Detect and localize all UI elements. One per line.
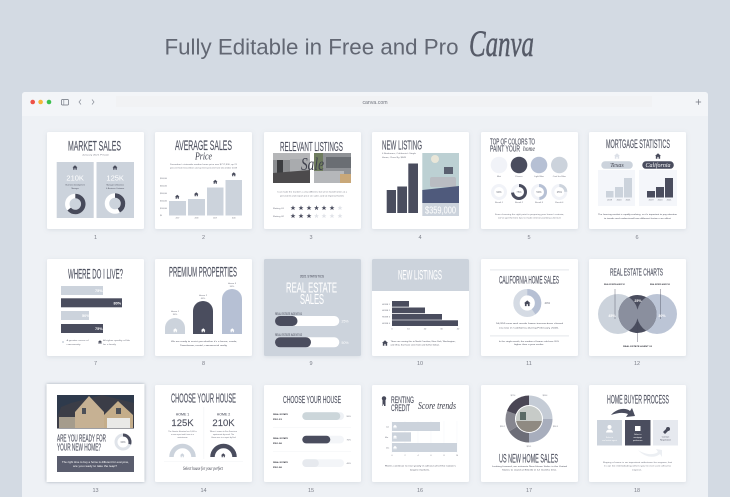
panel: 2 average sales: 2019 xyxy=(213,218,217,220)
title xyxy=(164,24,534,65)
panel: 2 average sales: 2020 xyxy=(232,218,236,220)
panel: 2 average sales: 2018 xyxy=(195,218,198,220)
panel: 16 renting credit: 10 xyxy=(456,455,458,457)
panel: 9 real estate sales: 2021 STATISTICS xyxy=(300,274,324,278)
panel: 8 premium properties: Townhome, rental, commercial realty xyxy=(180,344,228,347)
panel: 9 real estate sales: 50% xyxy=(342,341,349,345)
panel: 13 are you ready: YOUR NEW HOME? xyxy=(57,442,101,454)
panel: 3 relevant listings: I can make the market's a very different, but we've found homes at a xyxy=(277,190,348,194)
panel: 12 real estate charts: REAL ESTATE AGENT 01 xyxy=(604,283,626,286)
panel: 17 us new home sales: US NEW HOME SALES xyxy=(499,453,558,465)
panel: 14 choose your house: HOME 1 xyxy=(176,412,189,416)
panel: 15 choose your house: 70% xyxy=(346,440,351,442)
panel: 15 choose your house: REAL ESTATE xyxy=(273,461,289,464)
arrow xyxy=(611,408,635,417)
panel: 16 renting credit: 4 xyxy=(417,455,419,457)
panel: 18 home buyer process: preference xyxy=(633,440,643,442)
panel: 11 california home sales: escrow in California during February 2020. xyxy=(499,326,560,330)
panel: 14 choose your house: The Greater Houston has 1,000 in xyxy=(168,430,197,433)
panel: 1 market sales: & Business Customer xyxy=(106,187,125,190)
browser window: canva.com xyxy=(362,100,388,106)
photo: interior room xyxy=(273,153,310,183)
panel: 15 choose your house xyxy=(264,385,361,482)
donut chart with photo xyxy=(506,396,552,443)
panel: 5 top of colors: 50% xyxy=(536,190,542,194)
panel: 5 top of colors: Result 4 xyxy=(555,201,564,204)
panel: 15 choose your house: $52.01 xyxy=(273,419,283,421)
panel: 8 premium properties xyxy=(155,259,252,356)
panel: 10 new listings: HOME 3 xyxy=(382,316,391,318)
panel: 18 home buyer process: expect. xyxy=(632,468,643,472)
panel: 10 new listings: There are seeing this in North Carolina, New York, Washington, xyxy=(390,340,456,343)
panel: 9 real estate sales: REAL ESTATE xyxy=(286,280,337,296)
panel: 16 renting credit: RENTING xyxy=(391,395,414,406)
panel: 5 top of colors: Result 1 xyxy=(495,201,504,204)
panel: 12 real estate charts: REAL ESTATE CHARTS xyxy=(610,266,663,278)
panel: 5 top of colors: TOP OF COLORS TO xyxy=(490,136,535,146)
photo: house xyxy=(57,395,134,428)
panel: 11 california home sales: CALIFORNIA HOME SALES xyxy=(499,274,559,286)
panel: 6 mortgage statistics: 2020 xyxy=(658,200,663,202)
label 13: 13 xyxy=(92,488,99,494)
panel: 14 choose your house: When it comes to San Francisco xyxy=(210,430,237,433)
panel: 17 us new home sales xyxy=(481,385,578,482)
panel: 10 new listings: 0 xyxy=(391,328,393,330)
panel: 15 choose your house: REAL ESTATE xyxy=(273,437,289,440)
panel: 8 premium properties: House 1 xyxy=(171,311,180,313)
panel: 3 relevant listings: RELEVANT LISTINGS xyxy=(280,140,343,154)
label 2: 2 xyxy=(202,235,205,241)
panel: 16 renting credit xyxy=(372,385,469,482)
panel: 1 market sales: Business Development xyxy=(66,184,85,186)
panel: 11 california home sales: In the single month, the number of homes sold was 20% xyxy=(499,340,559,343)
panel: 15 choose your house: CHOOSE YOUR HOUSE xyxy=(283,394,341,406)
panel: 10 new listings: 30 xyxy=(440,328,443,330)
panel: 15 choose your house: REAL ESTATE xyxy=(273,413,289,416)
panel: 6 mortgage statistics: 2021 xyxy=(667,200,672,202)
panel: 14 choose your house: Select house for your perfect xyxy=(183,465,223,472)
panel: 14 choose your house: HOME 2 xyxy=(217,412,230,416)
panel: 18 home buyer process: Select a xyxy=(634,433,642,436)
icon: key xyxy=(382,396,386,406)
panel: 13 are you ready: 30% xyxy=(120,440,126,444)
panel: 8 premium properties: House 3 xyxy=(228,283,237,285)
label 9: 9 xyxy=(309,361,313,367)
panel: 7 where do i live: community xyxy=(66,343,82,346)
label 18: 18 xyxy=(634,488,640,494)
label 12: 12 xyxy=(634,361,640,367)
panel: 5 top of colors: home xyxy=(523,145,535,153)
panel: 8 premium properties: 30% xyxy=(173,314,177,316)
title: Canva xyxy=(469,24,534,65)
panel: 8 premium properties: 50% xyxy=(230,286,234,288)
panel: 1 market sales: MARKET SALES xyxy=(68,139,121,154)
browser window xyxy=(22,92,708,497)
panel: 7 where do i live: A greater sense of xyxy=(66,339,89,342)
panel: 3 relevant listings xyxy=(264,132,361,229)
star ratings xyxy=(290,205,342,218)
panel: 8 premium properties: 40% xyxy=(201,298,205,300)
panel: 18 home buyer process: mortgage xyxy=(633,436,643,439)
panel: 12 real estate charts: REAL ESTATE AGENT 02 xyxy=(650,283,671,286)
panel: 10 new listings: 10 xyxy=(407,328,410,330)
panel: 2 average sales: $300,000 xyxy=(160,193,167,195)
panel: 7 where do i live xyxy=(47,259,144,356)
panel: 2 average sales: $400,000 xyxy=(160,186,167,188)
panel: 5 top of colors: we've got the best tips to make interior painting a breeze xyxy=(498,216,562,220)
panel: 5 top of colors: Result 3 xyxy=(535,201,544,204)
panel: 11 california home sales: higher than a year earlier. xyxy=(514,343,544,346)
panel: 10 new listings: 40 xyxy=(457,328,460,330)
panel: 10 new listings: HOME 2 xyxy=(382,310,391,312)
panel: 14 choose your house xyxy=(155,385,252,482)
panel: 1 market sales: Manager & Business xyxy=(106,184,124,186)
panel: 5 top of colors: Flavors xyxy=(515,175,523,178)
panel: 3 relevant listings: Rating 01 xyxy=(273,207,285,210)
panel: 9 real estate sales: REAL ESTATE AGENT 01 xyxy=(275,312,302,316)
arrow xyxy=(638,449,662,457)
panel: 7 where do i live: WHERE DO I LIVE? xyxy=(68,267,123,282)
panel: 18 home buyer process xyxy=(589,385,686,482)
panel: 5 top of colors: 75% xyxy=(516,190,522,194)
panel: 12 real estate charts: 25% xyxy=(634,299,642,303)
panel: 2 average sales: percent from December and up 16.5 percent from December 2019 xyxy=(170,166,238,170)
label 4: 4 xyxy=(418,235,422,241)
panel: 15 choose your house: 90% xyxy=(346,416,351,418)
panel: 16 renting credit: Mar xyxy=(385,436,389,439)
label 5: 5 xyxy=(527,235,531,241)
label 6: 6 xyxy=(635,235,639,241)
panel: 11 california home sales: 54,955 new and resale home transactions closed xyxy=(496,322,564,325)
panel: 10 new listings xyxy=(372,259,469,356)
panel: 5 top of colors: Light Blue xyxy=(534,175,545,178)
panel: 2 average sales: $500,000 xyxy=(160,178,167,180)
panel: 13 are you ready: ARE YOU READY FOR xyxy=(57,432,106,444)
panel: 4 new listing xyxy=(372,132,469,229)
panel: 16 renting credit: Score trends xyxy=(418,400,456,412)
panel: 3 relevant listings: Sale xyxy=(301,154,324,174)
panel: 16 renting credit: 2 xyxy=(404,455,406,457)
panel: 5 top of colors: 25% xyxy=(557,190,563,194)
panel: 6 mortgage statistics: to trends and understand how different factors can affect xyxy=(604,217,671,220)
bar chart xyxy=(387,164,418,213)
panel: 17 us new home sales: $26.2 xyxy=(500,426,505,428)
panel: 16 renting credit: Rents continue to rise yearly in almost all of the nation's xyxy=(385,464,457,468)
panel: 7 where do i live: 75% xyxy=(95,289,103,293)
panel: 5 top of colors: Result 2 xyxy=(515,201,524,204)
panel: 4 new listing: 4 Bedrooms, California's Single xyxy=(382,152,417,155)
panel: 15 choose your house: 40% xyxy=(346,463,351,465)
panel: 17 us new home sales: Looking forward, we estimate New Home Sales in the United xyxy=(492,465,568,468)
panel: 14 choose your house: Home was in a report by Fed xyxy=(211,436,236,439)
panel: 14 choose your house: a new report and it was in a xyxy=(171,433,195,436)
panel: 16 renting credit: Dec xyxy=(386,448,389,450)
panel: 14 choose your house: apartments by week. The xyxy=(213,433,234,436)
panel: 5 top of colors: 90% xyxy=(496,190,502,194)
panel: 18 home buyer process: Select a xyxy=(606,436,614,439)
panel: 6 mortgage statistics: 2020 xyxy=(617,200,622,202)
label 15: 15 xyxy=(308,488,314,494)
panel: 15 choose your house: $52.00 xyxy=(273,467,283,469)
panel: 16 renting credit: 6 xyxy=(430,455,432,457)
panel: 10 new listings: 20 xyxy=(424,328,427,330)
panel: 6 mortgage statistics: 2019 xyxy=(649,200,654,202)
label 1: 1 xyxy=(94,235,97,241)
panel: 13 are you ready: The right time to buy a home is different for everyone, xyxy=(62,461,129,464)
panel: 1 market sales: Manager xyxy=(71,187,79,190)
label 17: 17 xyxy=(526,488,532,494)
panel: 5 top of colors: Mist xyxy=(497,175,501,178)
panel: 16 renting credit: largest markets. xyxy=(410,468,431,472)
panel: 5 top of colors: Cool Ice Blue xyxy=(553,176,567,178)
panel: 15 choose your house: $52.00 xyxy=(273,443,283,445)
panel: 1 market sales xyxy=(47,132,144,229)
label 8: 8 xyxy=(202,361,205,367)
panel: 2 average sales: $200,000 xyxy=(160,200,167,202)
panel: 9 real estate sales: REAL ESTATE AGENT 02 xyxy=(275,333,302,337)
bar chart xyxy=(392,301,458,326)
panel: 6 mortgage statistics: 2019 xyxy=(607,200,613,202)
label 3: 3 xyxy=(309,235,313,241)
panel: 7 where do i live: 50% xyxy=(82,314,90,318)
panel: 17 us new home sales: $26.4 xyxy=(543,395,547,397)
panel: 7 where do i live: 80% xyxy=(114,301,122,305)
panel: 8 premium properties: We are ready to assist you whether it's a house, condo, xyxy=(171,340,237,343)
panel: 9 real estate sales xyxy=(264,259,361,356)
panel: 1 market sales: January 2021 Private xyxy=(82,154,110,156)
panel: 10 new listings: HOME 1 xyxy=(382,304,391,306)
panel: 18 home buyer process: Negotiation xyxy=(660,438,672,442)
panel: 2 average sales: 2017 xyxy=(176,218,179,220)
panel: 18 home buyer process: Contact xyxy=(662,436,670,438)
photo: kitchen xyxy=(314,153,351,183)
panel: 3 relevant listings: Rating 02 xyxy=(273,215,285,218)
panel: 1 market sales: 210K xyxy=(66,174,84,182)
panel: 12 real estate charts: 30% xyxy=(658,314,666,318)
panel: 6 mortgage statistics xyxy=(589,132,686,229)
panel: 17 us new home sales: $25.1 xyxy=(527,446,531,448)
panel: 13 are you ready xyxy=(46,384,144,482)
panel: 9 real estate sales: SALES xyxy=(300,292,324,308)
panel: 17 us new home sales: $24.3 xyxy=(553,426,558,428)
panel: 5 top of colors: PAINT YOUR xyxy=(490,144,520,154)
panel: 16 renting credit: 0 xyxy=(391,455,393,457)
panel: 5 top of colors xyxy=(481,132,578,229)
panel: 11 california home sales: 40% xyxy=(544,301,551,305)
panel: 5 top of colors: From choosing the right paint to preparing your home's exterior, xyxy=(495,213,564,216)
panel: 6 mortgage statistics: Texas xyxy=(610,163,624,169)
panel: 6 mortgage statistics: 2021 xyxy=(626,200,631,202)
panel: 6 mortgage statistics: The housing market is rapidly evolving, so it's important to pay attention xyxy=(598,213,678,216)
panel: 17 us new home sales: $27.4 xyxy=(511,395,515,397)
panel: 12 real estate charts: 45% xyxy=(608,314,616,318)
panel: 1 market sales: 125K xyxy=(106,174,124,182)
panel: 10 new listings: HOME 4 xyxy=(382,323,391,325)
panel: 7 where do i live: A higher quality of life xyxy=(103,339,131,342)
panel: 4 new listing: Home, Close By, $849 xyxy=(382,157,407,159)
panel: 2 average sales xyxy=(155,132,252,229)
panel: 14 choose your house: CHOOSE YOUR HOUSE xyxy=(171,391,236,405)
panel: 7 where do i live: for a family xyxy=(103,343,117,346)
panel: 10 new listings: NEW LISTINGS xyxy=(398,268,442,283)
panel: 2 average sales: Price xyxy=(194,152,212,162)
label 14: 14 xyxy=(200,488,207,494)
panel: 7 where do i live: 75% xyxy=(95,327,103,331)
panel: 2 average sales: December's statewide median home price was $717,930, up 21 xyxy=(170,163,238,166)
panel: 16 renting credit: CREDIT xyxy=(391,403,410,414)
label 7: 7 xyxy=(94,361,97,367)
panel: 11 california home sales xyxy=(481,259,578,356)
venn diagram xyxy=(598,294,677,334)
panel: 10 new listings: and Ohio, that have seen from and further below. xyxy=(390,344,440,346)
panel: 18 home buyer process: real estate agent xyxy=(602,439,617,442)
panel: 2 average sales: $0 xyxy=(160,215,162,217)
panel: 4 new listing: $359,000 xyxy=(425,206,456,216)
label 10: 10 xyxy=(417,361,423,367)
panel: 18 home buyer process: Buying a home is an important milestone for anyone, but xyxy=(603,461,672,464)
label 11: 11 xyxy=(526,361,532,367)
label 16: 16 xyxy=(417,488,423,494)
panel: 14 choose your house: 210K xyxy=(212,418,235,429)
panel: 8 premium properties: PREMIUM PROPERTIES xyxy=(169,265,237,280)
panel: 12 real estate charts xyxy=(589,259,686,356)
panel: 9 real estate sales: 25% xyxy=(342,320,349,324)
panel: 17 us new home sales: States to stand at 800.00 in 12 months time. xyxy=(502,468,557,472)
panel: 16 renting credit: 8 xyxy=(443,455,445,457)
title: Fully Editable in Free and Pro xyxy=(164,34,458,60)
panel: 3 relevant listings: persistent and report price on sales and at imperial hotels xyxy=(280,194,345,198)
panel: 18 home buyer process: it can be intimidating when you're not sure what to xyxy=(604,464,672,468)
panel: 2 average sales: $100,000 xyxy=(160,208,167,210)
panel: 2 average sales: AVERAGE SALES xyxy=(175,138,232,153)
panel: 4 new listing: NEW LISTING xyxy=(382,138,422,152)
panel: 14 choose your house: 125K xyxy=(171,418,194,429)
panel: 14 choose your house: mainstream xyxy=(178,436,188,439)
panel: 12 real estate charts: REAL ESTATE AGENT 03 xyxy=(623,345,653,348)
panel: 8 premium properties: House 2 xyxy=(199,295,208,297)
photo: living room xyxy=(422,153,459,203)
panel: 6 mortgage statistics: California xyxy=(645,162,671,169)
panel: 13 are you ready: are you ready to take the leap? xyxy=(73,465,118,468)
panel: 16 renting credit: Jun xyxy=(386,426,389,428)
